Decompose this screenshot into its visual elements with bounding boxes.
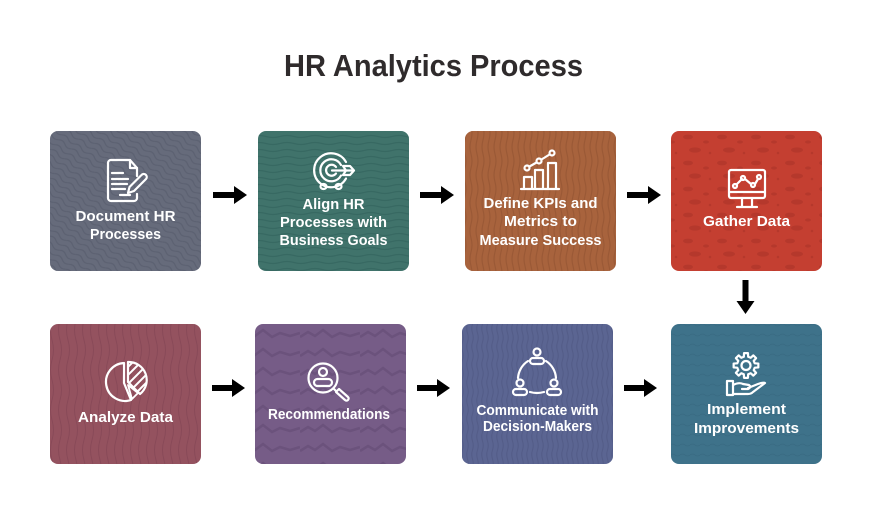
arrow xyxy=(627,186,661,204)
label: Align HR Processes with Business Goals: Processes with xyxy=(280,215,387,231)
icon: gear over hand xyxy=(727,353,765,395)
icon: magnifier with person xyxy=(308,364,349,401)
arrow xyxy=(420,186,454,204)
arrow xyxy=(213,186,247,204)
label: Document HR Processes: Processes xyxy=(90,227,161,243)
icon: bar chart with trend xyxy=(521,150,559,189)
panel: Gather Data xyxy=(671,131,822,271)
label: Recommendations: Recommendations xyxy=(268,407,390,423)
panel: Recommendations xyxy=(255,324,406,464)
panel: Align HR Processes xyxy=(258,131,409,271)
panel: Communicate with Decision-Makers xyxy=(462,324,613,464)
icon: document with pen xyxy=(108,160,147,201)
label: Align HR Processes with Business Goals: Business Goals xyxy=(280,233,388,249)
arrow xyxy=(624,379,657,397)
label: Communicate with Decision-Makers: Decision-Makers xyxy=(483,419,592,435)
panel: Document HR Processes xyxy=(50,131,201,271)
label: Align HR Processes with Business Goals: Align HR xyxy=(302,197,365,213)
label: Implement Improvements: Improvements xyxy=(694,421,799,437)
label: Document HR Processes xyxy=(76,209,176,243)
title: HR Analytics Process xyxy=(284,49,583,83)
arrow xyxy=(212,379,245,397)
label: Define KPIs and Metrics to Measure Success: Metrics to xyxy=(504,214,577,230)
label: Define KPIs and Metrics to Measure Success xyxy=(480,196,602,249)
label: Align HR Processes with Business Goals xyxy=(280,197,388,249)
label: Define KPIs and Metrics to Measure Success: Measure Success xyxy=(480,233,602,249)
label: Communicate with Decision-Makers: Communicate with xyxy=(476,403,598,419)
label: Gather Data: Gather Data xyxy=(703,214,791,230)
label: Document HR Processes: Document HR xyxy=(76,209,176,225)
label: Communicate with Decision-Makers xyxy=(476,403,598,435)
panel: Implement Improvements xyxy=(671,324,822,464)
label: Analyze Data: Analyze Data xyxy=(78,410,174,426)
label: Implement Improvements: Implement xyxy=(707,402,786,418)
icon: pie chart xyxy=(106,361,152,401)
panel: Define KPIs xyxy=(465,131,616,271)
label: Define KPIs and Metrics to Measure Success: Define KPIs and xyxy=(484,196,598,212)
panel: Analyze Data xyxy=(50,324,201,464)
icon: monitor with line chart xyxy=(729,170,765,207)
arrow: down xyxy=(736,280,754,314)
icon: three connected people xyxy=(513,348,561,395)
icon: target xyxy=(314,153,354,189)
label: Implement Improvements xyxy=(694,402,799,437)
arrow xyxy=(417,379,450,397)
